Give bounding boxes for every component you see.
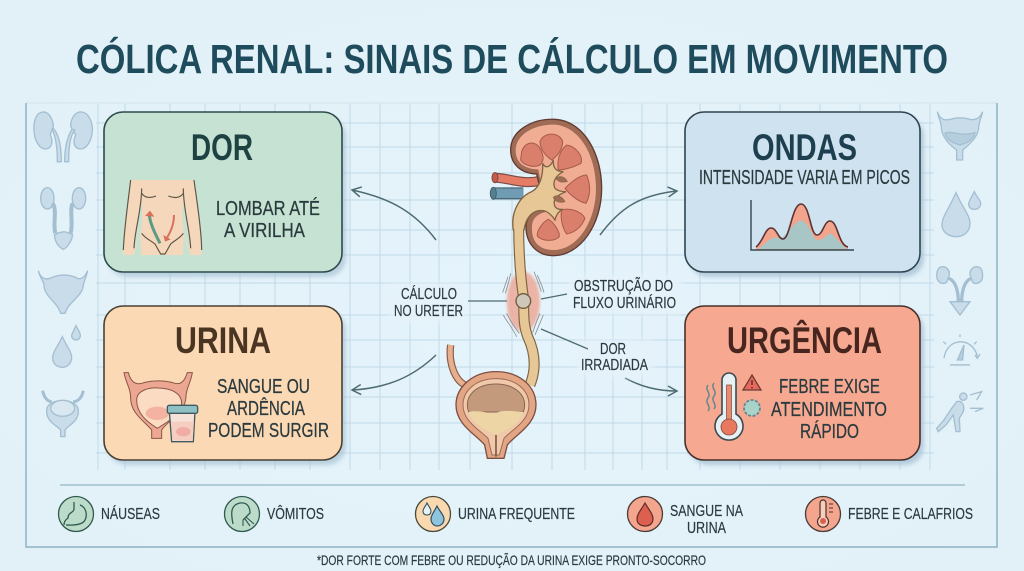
symptom: vômitos: VÔMITOS	[267, 504, 324, 523]
symptom: febre e calafrios	[806, 496, 973, 532]
icon: torso with pain arrows	[123, 180, 202, 255]
icon: thermometer	[806, 496, 840, 532]
arrow: to urina	[352, 355, 436, 390]
icon: stomach	[58, 496, 94, 532]
text: sangue ou ardência podem surgir: ARDÊNCIA	[227, 397, 305, 420]
callout: cálculo no ureter: NO URETER	[394, 303, 463, 320]
callout: dor irradiada: DOR	[600, 341, 626, 358]
arrow: to dor	[352, 190, 436, 240]
left faint icon column	[34, 112, 92, 437]
icon: gauge	[943, 334, 980, 365]
chart: pain wave peaks	[751, 200, 854, 250]
text: febre exige atendimento rápido: RÁPIDO	[800, 420, 859, 443]
right faint icon column	[937, 112, 983, 432]
icon: bladder	[38, 271, 88, 313]
symptom: sangue na urina: SANGUE NA	[670, 503, 743, 520]
heading: ondas: ONDAS	[752, 127, 857, 168]
ureter outline	[519, 225, 534, 385]
callout: cálculo no ureter: CÁLCULO	[401, 286, 457, 303]
icon: drops	[942, 192, 981, 237]
icon: drops	[53, 326, 80, 367]
text: febre exige atendimento rápido: FEBRE EXIGE	[779, 376, 880, 398]
icon: droplets	[416, 496, 450, 532]
text: febre exige atendimento rápido: ATENDIMENTO	[771, 399, 887, 421]
icon: bladder with fluid	[937, 112, 983, 160]
icon: thermometer with alert	[707, 373, 761, 440]
heading: urgência: URGÊNCIA	[727, 319, 882, 361]
stone in ureter	[516, 294, 531, 308]
symptom: náuseas	[58, 496, 160, 532]
callout: obstrução do fluxo urinário	[541, 276, 680, 314]
heading: dor: DOR	[191, 127, 253, 168]
icon: head vomiting	[224, 496, 260, 532]
central anatomy: kidney, ureter, bladder	[450, 119, 602, 458]
callout: dor irradiada	[541, 329, 652, 376]
text: lombar até a virilha	[216, 197, 320, 242]
arrow: to ondas	[600, 191, 677, 235]
panel: ondas	[685, 112, 924, 277]
text: intensidade varia em picos: INTENSIDADE VARIA EM PICOS	[699, 167, 910, 189]
symptom: vômitos	[224, 496, 324, 532]
callout: obstrução do fluxo urinário: FLUXO URINÁRIO	[573, 295, 676, 312]
icon: urinary tract	[41, 188, 86, 249]
kidney	[511, 119, 602, 256]
symptom: sangue na urina: URINA	[687, 520, 726, 537]
callout: obstrução do fluxo urinário: OBSTRUÇÃO DO	[574, 278, 673, 295]
text: sangue ou ardência podem surgir	[208, 376, 329, 442]
text: lombar até a virilha: LOMBAR ATÉ	[216, 197, 320, 220]
arrow: to urgência	[625, 378, 677, 391]
callout: cálculo no ureter	[391, 284, 507, 322]
text: febre exige atendimento rápido	[771, 376, 887, 443]
bladder	[450, 345, 536, 458]
symptom: urina frequente: URINA FREQUENTE	[458, 506, 575, 523]
obstruction glow	[503, 272, 544, 337]
symptom: urina frequente	[416, 496, 575, 532]
panel: dor	[104, 112, 346, 277]
heading: urina: URINA	[175, 320, 271, 361]
symptom: náuseas: NÁUSEAS	[101, 504, 160, 523]
text: sangue ou ardência podem surgir: PODEM SURGIR	[208, 420, 329, 442]
icon: kidneys	[34, 112, 92, 162]
icon: person in pain	[937, 392, 983, 432]
symptom: febre e calafrios: FEBRE E CALAFRIOS	[848, 506, 973, 523]
symptom: sangue na urina	[628, 496, 743, 537]
footnote: *DOR FORTE COM FEBRE OU REDUÇÃO DA URINA EXIGE PRONTO-SOCORRO	[317, 552, 706, 568]
panel: urina	[104, 306, 346, 465]
icon: bladder outline	[43, 391, 83, 437]
text: lombar até a virilha: A VIRILHA	[224, 220, 306, 242]
renal pelvis	[513, 160, 567, 230]
icon: bladder and urine cup	[124, 373, 198, 442]
icon: blood drop	[628, 496, 662, 532]
callout: dor irradiada: IRRADIADA	[581, 357, 649, 374]
ureter fill	[519, 225, 534, 385]
panel: urgência	[685, 306, 924, 465]
vessels	[490, 173, 540, 199]
icon: kidneys with arrow	[937, 267, 983, 315]
text: sangue ou ardência podem surgir: SANGUE OU	[217, 376, 310, 398]
